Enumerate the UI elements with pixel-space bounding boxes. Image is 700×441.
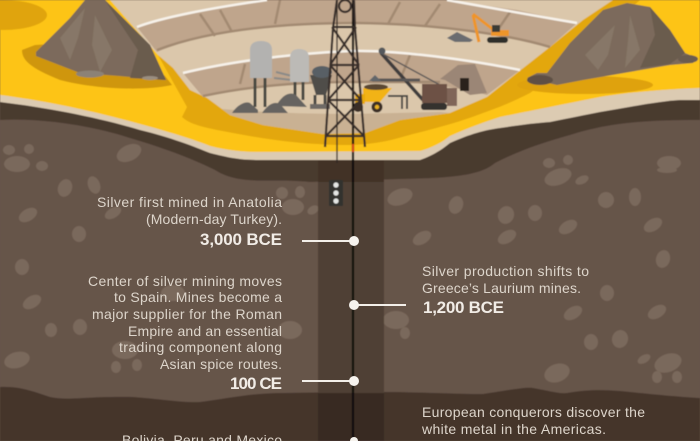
right mountain: [527, 3, 698, 85]
left mountain: [36, 0, 166, 80]
deep soil layer: [0, 387, 700, 441]
text: 100 CE event: 100 CE: [230, 374, 282, 393]
mountain shadow left: [22, 40, 172, 89]
text: Americas event: white metal in the Americas.: [421, 421, 606, 437]
dump truck: [353, 84, 392, 112]
text: 1,200 BCE event: 1,200 BCE: [423, 298, 504, 317]
text: 100 CE event: Asian spice routes.: [160, 356, 282, 372]
text: 100 CE event: [88, 273, 282, 393]
terrace wall one: [137, 0, 577, 52]
drill shafts: [337, 0, 353, 441]
text: 1,200 BCE event: Greece’s Laurium mines.: [422, 280, 581, 296]
text: 1,200 BCE event: Silver production shifts to: [422, 263, 589, 279]
signal light box: [329, 180, 343, 206]
timeline connectors and markers: [302, 236, 406, 441]
mountain shadow right: [517, 76, 653, 94]
excavator: [447, 14, 509, 43]
wall shadow strips: [157, 0, 550, 96]
text: 100 CE event: major supplier for the Roman: [92, 306, 282, 322]
text: 100 CE event: Center of silver mining moves: [88, 273, 282, 289]
hopper: [310, 66, 332, 109]
text: Americas event: European conquerors discover the: [422, 404, 645, 420]
text: 3,000 BCE event: [97, 194, 282, 249]
terrace wall two: [183, 50, 520, 97]
text: 100 CE event: Empire and an essential: [128, 323, 282, 339]
dragline excavator: [369, 48, 457, 110]
text: 1,200 BCE event: [422, 263, 589, 317]
pit floor: [110, 0, 613, 134]
surface cream band: [0, 85, 700, 160]
mine entrance: [440, 64, 487, 95]
text: 3,000 BCE event: 3,000 BCE: [200, 230, 282, 249]
text: 3,000 BCE event: Silver first mined in Anatolia: [97, 194, 282, 210]
lower tan floor: [222, 109, 450, 134]
dark subsurface band: [0, 90, 700, 182]
text: Americas event: [421, 404, 645, 437]
terrace white ledges: [137, 0, 577, 73]
central shaft: [318, 160, 384, 395]
dark yellow pit rim: [130, 0, 640, 145]
text: 100 CE event: to Spain. Mines become a: [114, 289, 282, 305]
derrick tower: [325, 0, 365, 147]
silos: [250, 41, 309, 107]
ore piles: [232, 93, 307, 113]
conveyor table: [388, 96, 408, 109]
yellow surface: [0, 0, 700, 152]
text: 3,000 BCE event: (Modern-day Turkey).: [146, 211, 282, 227]
soil pebbles: [2, 140, 684, 386]
top left shadow patch: [0, 0, 47, 30]
text: 100 CE event: trading component along: [119, 339, 282, 355]
